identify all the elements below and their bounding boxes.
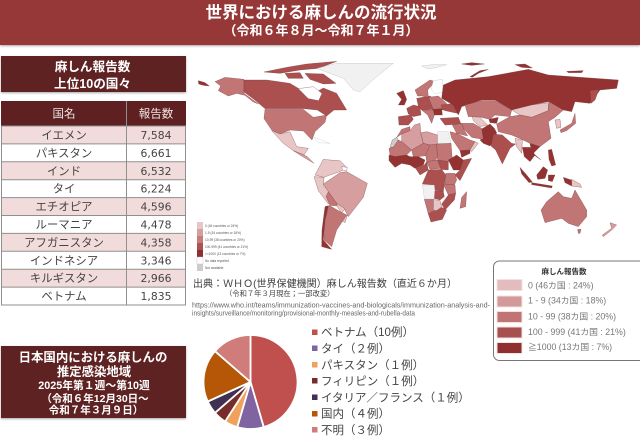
table: top 10 countries: パキスタン xyxy=(36,147,92,160)
table: top 10 countries: ルーマニア xyxy=(36,220,92,232)
title banner xyxy=(0,0,640,45)
panel: domestic estimated infection region heading: （令和６年12月30日～ xyxy=(41,392,149,405)
legend: case count colour key: 10 - 99 (38カ国 : 20%) xyxy=(528,312,616,322)
legend: case count colour key: 0 (46カ国 : 24%) xyxy=(528,280,594,290)
pie legend: イタリア／フランス（１例） xyxy=(321,390,470,404)
table: top 10 countries: 4,596 xyxy=(141,201,172,214)
map legend (small) xyxy=(197,222,248,271)
pie legend: パキスタン（１例） xyxy=(321,358,424,372)
map legend (small): >=1000 (13 countries or 7%) xyxy=(205,252,245,256)
legend: case count colour key: 麻しん報告数 xyxy=(542,266,587,276)
map legend (small): 100-999 (41 countries or 21%) xyxy=(205,245,248,249)
map legend (small): 10-99 (38 countries or 20%) xyxy=(205,238,245,242)
legend: case count colour key xyxy=(494,261,640,360)
table: top 10 countries: インドネシア xyxy=(30,254,98,267)
panel: domestic estimated infection region heading: 推定感染地域 xyxy=(57,364,132,379)
source text: 出典：ＷＨＯ(世界保健機関）麻しん報告数（直近６か月） xyxy=(193,277,457,290)
table: top 10 countries: 6,532 xyxy=(141,165,171,178)
panel: domestic estimated infection region heading xyxy=(1,346,186,418)
pie legend: フィリピン（１例） xyxy=(321,374,424,388)
table: top 10 countries: 報告数 xyxy=(139,108,174,120)
table: top 10 countries: エチオピア xyxy=(36,201,92,214)
table: top 10 countries: 1,835 xyxy=(141,290,171,303)
panel: domestic estimated infection region heading: 2025年第１週～第10週 xyxy=(38,378,150,392)
legend: case count colour key: ≧1000 (13カ国 : 7%) xyxy=(528,341,612,352)
table: top 10 countries: 2,966 xyxy=(141,272,172,285)
panel: top 10 heading xyxy=(1,56,186,92)
table: top 10 countries: タイ xyxy=(53,183,75,196)
table: top 10 countries: 国名 xyxy=(52,106,76,120)
source text: （令和７年３月現在；一部改変） xyxy=(225,289,334,298)
world map xyxy=(198,61,618,249)
panel: top 10 heading: 上位10の国々 xyxy=(54,76,131,91)
panel: top 10 heading: 麻しん報告数 xyxy=(55,59,131,74)
panel: domestic estimated infection region heading: 令和７年３月９日） xyxy=(49,404,143,416)
pie legend: 国内（４例） xyxy=(321,406,390,420)
table: top 10 countries: 6,661 xyxy=(141,147,171,160)
map legend (small): Not available xyxy=(205,266,224,270)
table: top 10 countries: イエメン xyxy=(41,130,87,142)
table: top 10 countries: 4,478 xyxy=(141,218,172,232)
title banner: 世界における麻しんの流行状況 xyxy=(206,3,437,22)
panel: domestic estimated infection region heading: 日本国内における麻しんの xyxy=(19,350,167,364)
pie legend xyxy=(312,325,470,437)
pie legend: ベトナム（10例） xyxy=(321,325,414,339)
pie chart xyxy=(204,335,298,429)
source text xyxy=(192,277,491,318)
map legend (small): No data reported xyxy=(205,259,229,263)
map legend (small): 0 (46 countries or 24%) xyxy=(205,224,238,228)
table: top 10 countries: インド xyxy=(47,166,81,178)
map legend (small): 1-9 (34 countries or 18%) xyxy=(205,231,241,235)
table: top 10 countries: ベトナム xyxy=(41,290,87,303)
legend: case count colour key: 100 - 999 (41カ国 : 21%) xyxy=(528,327,626,337)
table: top 10 countries: 4,358 xyxy=(141,236,172,249)
table: top 10 countries: 3,346 xyxy=(141,254,172,267)
table: top 10 countries: 7,584 xyxy=(141,129,172,142)
title banner: （令和６年８月～令和７年１月） xyxy=(223,23,419,38)
map: Europe, Africa, Asia and Oceania xyxy=(389,63,618,237)
legend: case count colour key: 1 - 9 (34カ国 : 18%) xyxy=(528,296,606,306)
map: Americas and Greenland xyxy=(198,61,397,249)
source text: insights/surveillance/monitoring/provisional-monthly-measles-and-rubella-data xyxy=(192,310,415,318)
pie legend: タイ（２例） xyxy=(321,342,390,356)
table: top 10 countries: 6,224 xyxy=(141,183,172,196)
table: top 10 countries: アフガニスタン xyxy=(24,236,104,249)
pie legend: 不明（３例） xyxy=(321,423,390,437)
table: top 10 countries: キルギスタン xyxy=(30,272,98,285)
table: top 10 countries xyxy=(1,101,186,305)
source text: https://www.who.int/teams/immunization-vaccines-and-biologicals/immunization-analysis-and- xyxy=(192,302,491,310)
